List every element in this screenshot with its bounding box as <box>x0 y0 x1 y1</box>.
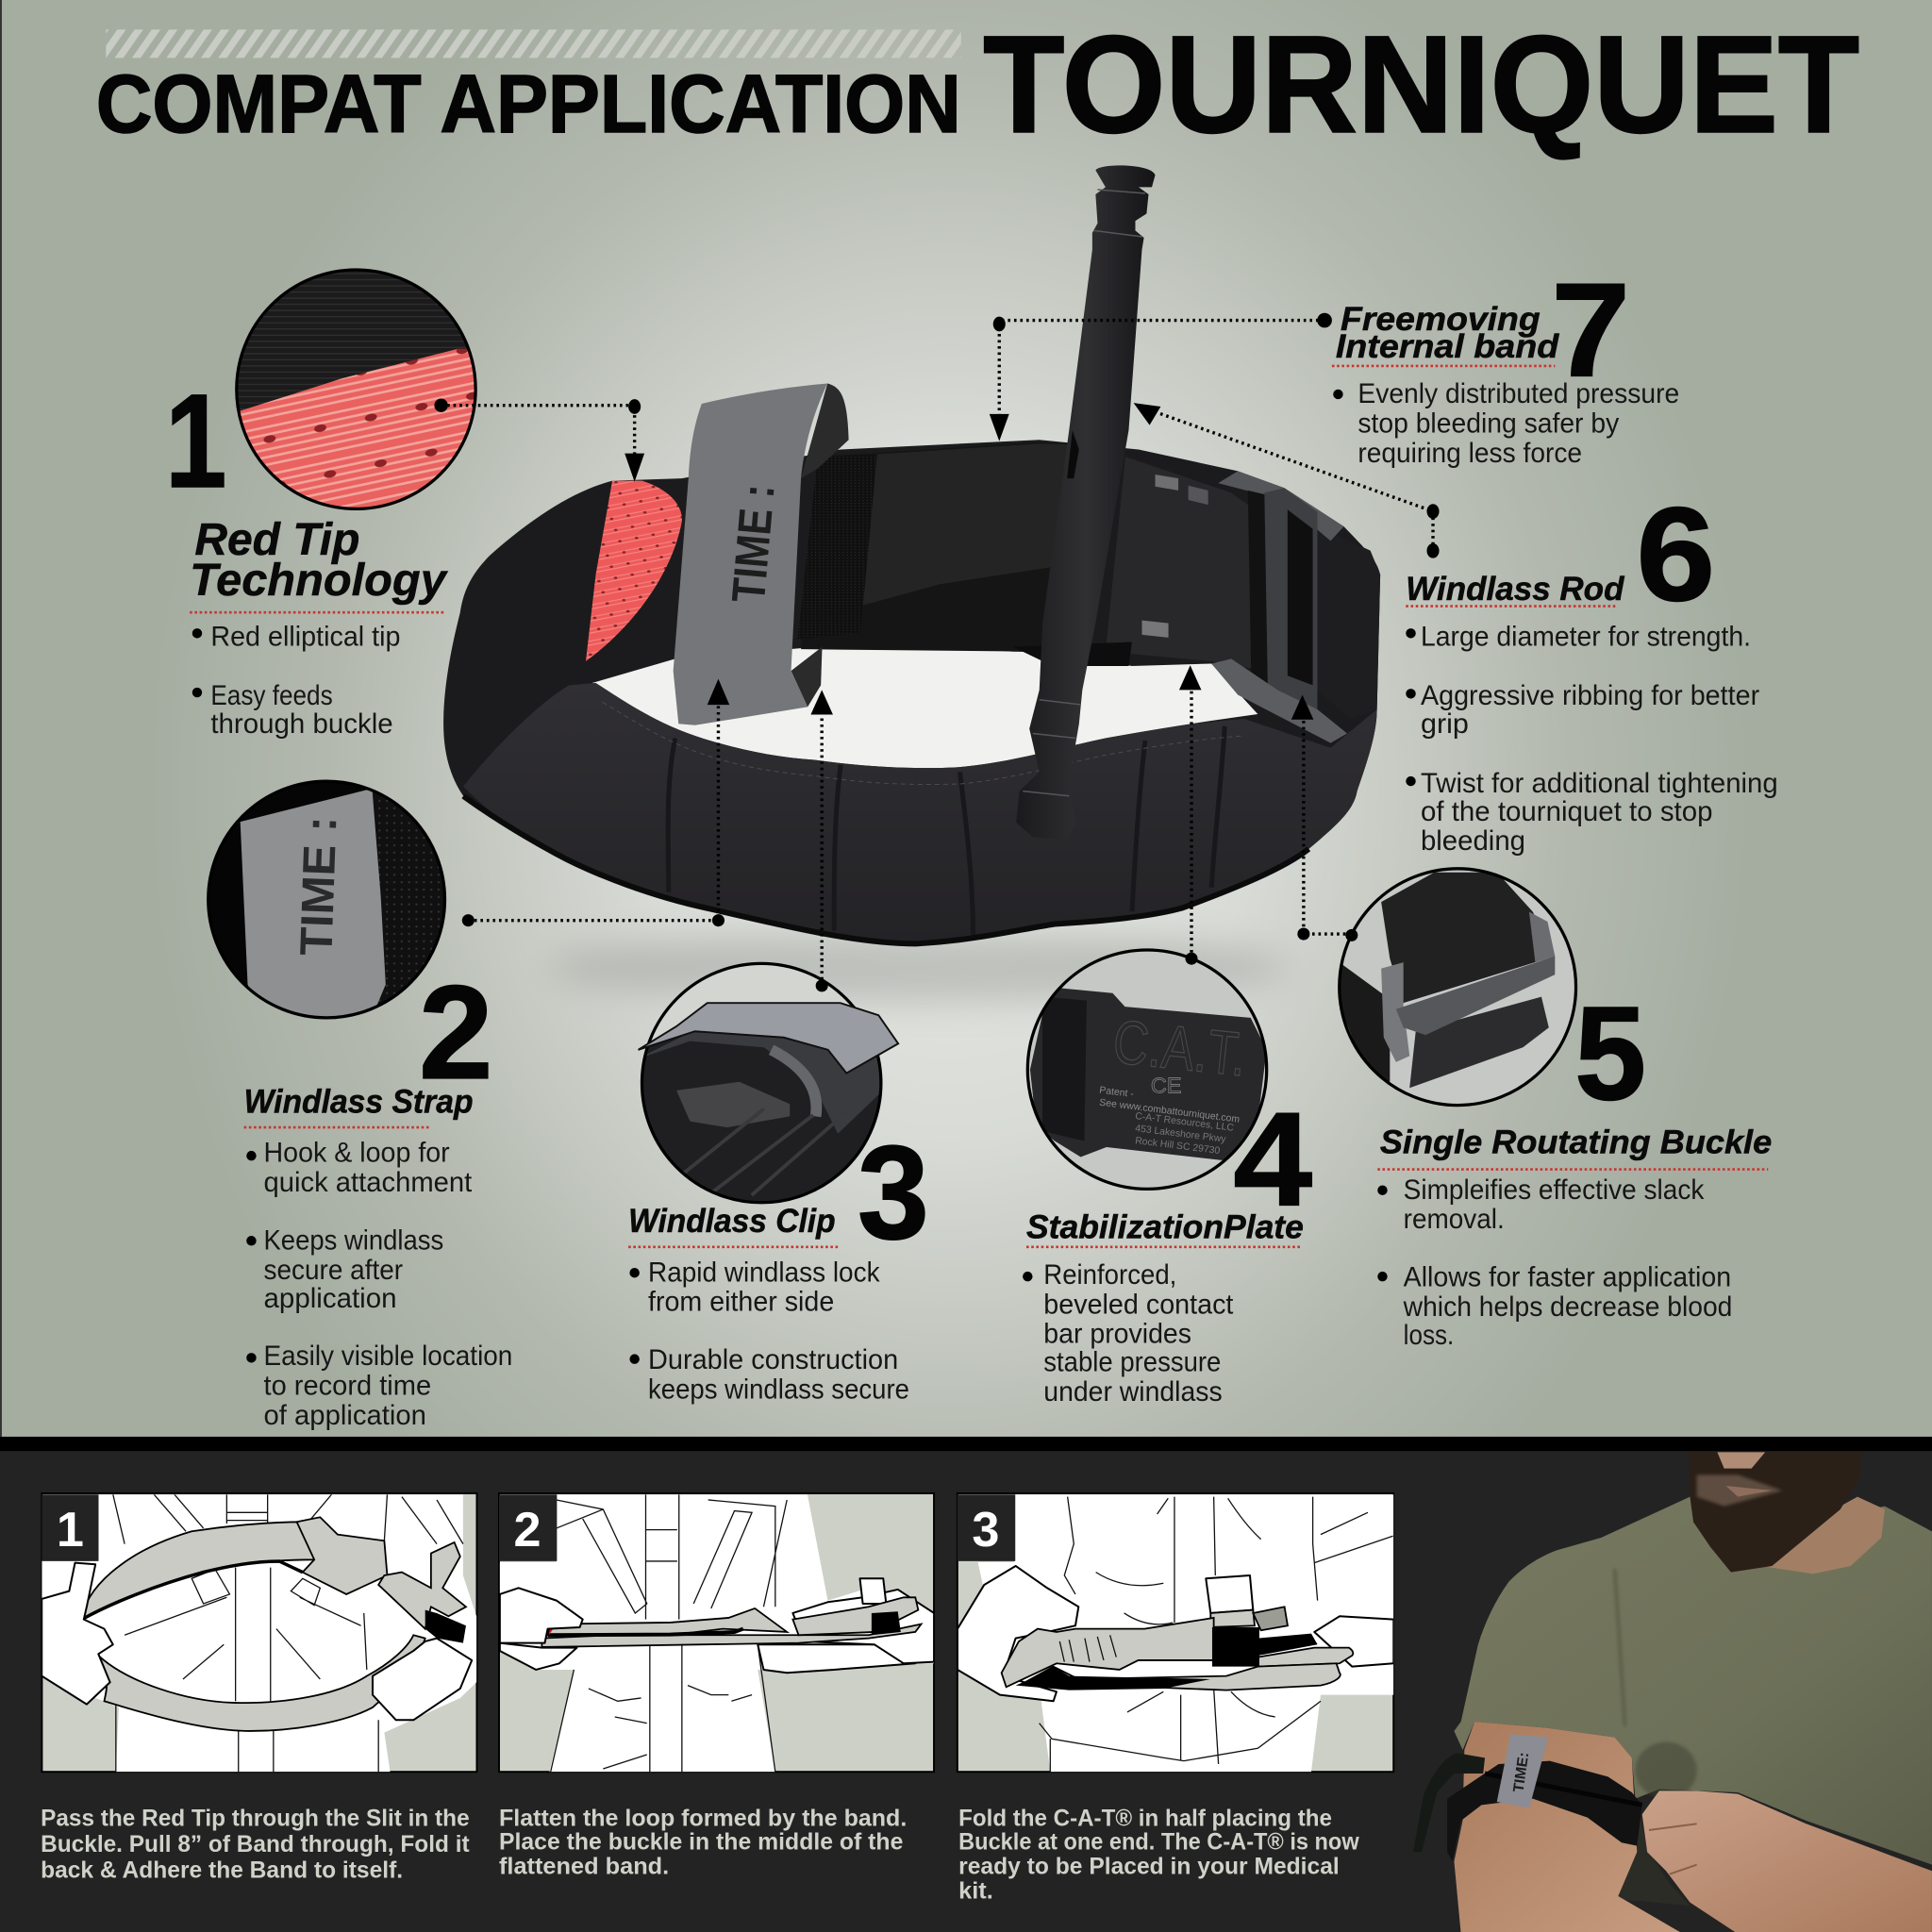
text block: item 3: Rapid windlass lock <box>648 1257 880 1288</box>
hand and forearm <box>1642 1790 1932 1932</box>
callout 1: red tip detail <box>165 269 487 565</box>
number 3: 3 <box>858 1118 929 1267</box>
step number 2: 2 <box>513 1503 541 1557</box>
band silhouette <box>443 440 1380 943</box>
step captions <box>41 1807 1359 1905</box>
text block: item 3 <box>629 1257 909 1405</box>
magnified buckle <box>1338 868 1579 1109</box>
number 4: 4 <box>1233 1084 1312 1233</box>
text block: item 7 <box>1333 378 1679 469</box>
heading: stabilization plate: StabilizationPlate <box>1026 1209 1304 1246</box>
text block: item 2: Easily visible location <box>264 1341 512 1372</box>
text block: item 6: Large diameter for strength. <box>1421 621 1751 652</box>
magnified plate: Patent - <box>1099 1086 1135 1100</box>
text block: item 6: bleeding <box>1421 825 1525 857</box>
text block: item 6: grip <box>1421 708 1469 740</box>
number 1: 1 <box>165 366 226 515</box>
text block: item 7: Evenly distributed pressure <box>1357 378 1679 409</box>
bottom panel <box>0 1437 1932 1932</box>
text block: item 1 <box>192 621 400 740</box>
face skin <box>1717 1452 1765 1469</box>
step captions: Place the buckle in the middle of the <box>499 1829 903 1855</box>
text block: item 2: of application <box>264 1400 426 1431</box>
callout 5: buckle detail <box>1338 868 1646 1127</box>
buckle <box>297 1517 387 1594</box>
flattened band <box>541 1624 921 1647</box>
tourniquet photo <box>443 165 1380 943</box>
strap label: TIME: <box>1510 1751 1532 1793</box>
heading: freemoving internal band: Internal band <box>1336 328 1560 365</box>
beard <box>1689 1452 1861 1573</box>
clip <box>860 1578 886 1604</box>
windlass rod <box>1016 165 1156 840</box>
heading: technology: Technology <box>190 555 448 606</box>
text block: item 7: stop bleeding safer by <box>1357 408 1620 439</box>
photo: man applying tourniquet <box>1413 1452 1932 1932</box>
magnified plate: 453 Lakeshore Pkwy <box>1135 1124 1227 1145</box>
number 5: 5 <box>1574 978 1646 1127</box>
text block: item 6: Aggressive ribbing for better <box>1421 680 1759 711</box>
sleeve and hands <box>500 1643 577 1670</box>
text block: item 4 <box>1023 1259 1233 1407</box>
gray strap back <box>801 384 849 478</box>
heading: Red Tip <box>194 514 359 565</box>
text block: item 5 <box>1377 1174 1732 1351</box>
right band section <box>1106 457 1264 671</box>
folded band <box>1257 1648 1353 1667</box>
step number 3: 3 <box>972 1503 999 1557</box>
text block: item 2: application <box>264 1283 397 1314</box>
step captions: flattened band. <box>499 1855 669 1880</box>
tourniquet band on arm <box>1447 1761 1642 1861</box>
torso <box>42 1494 476 1772</box>
heading: windlass clip: Windlass Clip <box>628 1203 836 1240</box>
gray strap end <box>639 1003 898 1074</box>
text block: item 6 <box>1406 621 1778 857</box>
text block: item 5: which helps decrease blood <box>1403 1291 1732 1323</box>
step captions: Pass the Red Tip through the Slit in the <box>41 1807 470 1832</box>
torso <box>958 1494 1393 1772</box>
velcro tail <box>1413 1753 1485 1852</box>
title: TOURNIQUET <box>983 8 1859 161</box>
text block: item 4: under windlass <box>1043 1376 1223 1407</box>
t-shirt <box>1454 1497 1932 1865</box>
red tip <box>72 1592 82 1620</box>
front band <box>463 683 1377 943</box>
step captions: Buckle. Pull 8” of Band through, Fold it <box>41 1832 470 1857</box>
upper band <box>82 1522 314 1620</box>
heading: freemoving internal band <box>1336 301 1560 365</box>
number 6: 6 <box>1637 479 1715 628</box>
background panel <box>0 0 1932 1437</box>
number 2: 2 <box>419 958 492 1107</box>
magnified strap: TIME : <box>291 816 346 957</box>
text block: item 3: Durable construction <box>648 1344 898 1375</box>
text block: item 5: Allows for faster application <box>1404 1262 1731 1293</box>
velcro <box>798 455 877 640</box>
heading: windlass strap: Windlass Strap <box>244 1083 474 1120</box>
step captions: ready to be Placed in your Medical <box>958 1855 1340 1880</box>
text block: item 1: through buckle <box>210 708 393 740</box>
step captions: Buckle at one end. The C-A-T® is now <box>958 1829 1359 1855</box>
step 1 illustration <box>42 1493 476 1772</box>
arm <box>1454 1722 1683 1932</box>
magnified plate <box>1026 949 1269 1191</box>
rod and buckle <box>1002 1618 1214 1687</box>
magnified clip <box>643 965 879 1202</box>
magnified plate: C-A-T Resources, LLC <box>1135 1111 1235 1134</box>
gray strap <box>1497 1734 1548 1808</box>
callout 3: windlass clip detail <box>638 962 925 1241</box>
number 7: 7 <box>1551 255 1630 404</box>
text block: item 6: of the tourniquet to stop <box>1421 796 1713 827</box>
connector dotted lines <box>434 313 1440 991</box>
shirt shadow under arm <box>1618 1799 1690 1906</box>
torso <box>500 1494 934 1772</box>
clip <box>1206 1575 1253 1613</box>
step captions: kit. <box>958 1879 993 1905</box>
text block: item 5: loss. <box>1404 1320 1454 1351</box>
text block: item 4: beveled contact <box>1043 1289 1233 1320</box>
magnified plate: C.A.T. <box>1110 1007 1250 1090</box>
red tip <box>586 481 682 661</box>
lower ring <box>98 1635 425 1731</box>
text block: item 2 <box>246 1138 512 1431</box>
heading: single rotating buckle: Single Routating Buckle <box>1380 1124 1772 1161</box>
callout 4: stabilization plate detail <box>1026 949 1312 1233</box>
heading: windlass rod: Windlass Rod <box>1406 571 1625 608</box>
strap label: TIME : <box>722 482 785 605</box>
text block: item 4: Reinforced, <box>1043 1259 1176 1291</box>
step number 1: 1 <box>57 1503 84 1557</box>
buckle <box>1211 471 1347 743</box>
windlass rod <box>1485 1774 1642 1805</box>
text block: item 3: from either side <box>648 1287 834 1318</box>
title: COMPAT APPLICATION <box>96 58 961 150</box>
text block: item 1: Red elliptical tip <box>210 621 400 652</box>
hands <box>1314 1616 1393 1667</box>
title <box>96 8 1859 161</box>
text block: item 6: Twist for additional tightening <box>1421 768 1778 799</box>
step captions: Flatten the loop formed by the band. <box>499 1807 907 1832</box>
floor shadow <box>548 933 1288 1002</box>
text block: item 2: to record time <box>264 1371 431 1402</box>
text block: item 2: secure after <box>264 1255 403 1286</box>
text block: item 2: Hook & loop for <box>264 1138 450 1169</box>
text block: item 3: keeps windlass secure <box>648 1374 909 1405</box>
gray strap <box>674 384 827 725</box>
loop opening <box>592 646 1257 768</box>
step captions: back & Adhere the Band to itself. <box>41 1858 403 1884</box>
hands <box>42 1563 113 1705</box>
magnified plate: Rock Hill SC 29730 <box>1135 1136 1221 1157</box>
text block: item 5: Simpleifies effective slack <box>1404 1174 1705 1206</box>
internal band <box>801 442 1079 652</box>
magnified strap <box>207 778 448 1023</box>
callout 2: windlass strap detail <box>207 778 492 1107</box>
step 2 illustration <box>499 1493 934 1772</box>
text block: item 4: bar provides <box>1043 1319 1191 1350</box>
text block: item 5: removal. <box>1404 1204 1505 1235</box>
text block: item 7: requiring less force <box>1357 438 1582 469</box>
step 3 illustration <box>958 1493 1393 1772</box>
magnified plate: See www.combattourniquet.com <box>1099 1098 1241 1125</box>
text block: item 2: quick attachment <box>264 1167 472 1198</box>
text block: item 1: Easy feeds <box>210 680 333 711</box>
heading: freemoving internal band: Freemoving <box>1341 301 1541 338</box>
magnified plate: CE <box>1151 1074 1182 1098</box>
neck <box>1738 1497 1885 1574</box>
text block: item 4: stable pressure <box>1043 1347 1221 1378</box>
step captions: Fold the C-A-T® in half placing the <box>958 1807 1332 1832</box>
magnified fabric <box>238 272 474 508</box>
text block: item 2: Keeps windlass <box>264 1224 443 1256</box>
